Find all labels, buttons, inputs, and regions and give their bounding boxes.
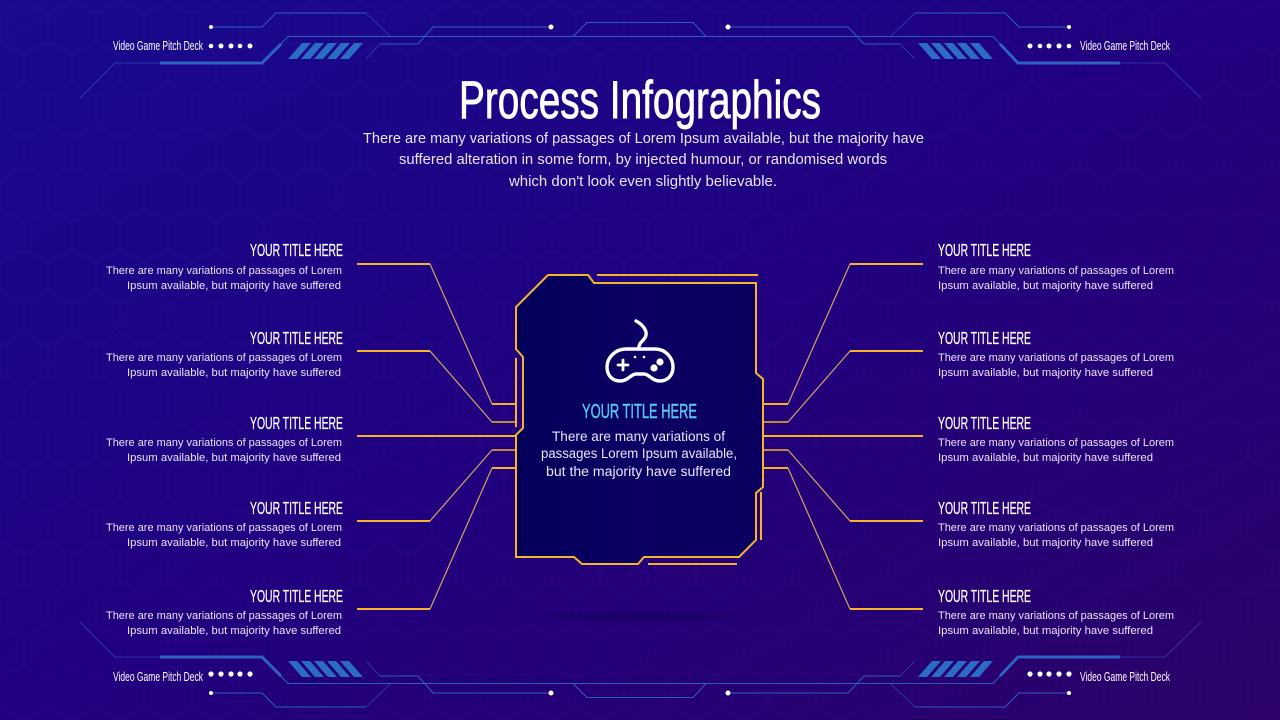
right item 4: YOUR TITLE HERE bbox=[938, 498, 1031, 518]
panel frame bbox=[516, 275, 763, 564]
left item 4: There are many variations of passages of Lorem bbox=[106, 522, 342, 534]
panel body text bbox=[541, 429, 737, 479]
left item 3: There are many variations of passages of Lorem bbox=[106, 437, 342, 449]
left item 3 bbox=[106, 413, 343, 464]
left item 2: There are many variations of passages of Lorem bbox=[106, 352, 342, 364]
title: Process Infographics bbox=[459, 71, 821, 130]
left item 4: YOUR TITLE HERE bbox=[250, 498, 343, 518]
subtitle: suffered alteration in some form, by injected humour, or randomised words bbox=[399, 152, 887, 168]
right item 2: YOUR TITLE HERE bbox=[938, 328, 1031, 348]
right item 3: There are many variations of passages of Lorem bbox=[938, 437, 1174, 449]
right item 1: YOUR TITLE HERE bbox=[938, 240, 1031, 260]
left item 3: YOUR TITLE HERE bbox=[250, 413, 343, 433]
left item 1 bbox=[106, 240, 343, 292]
left item 1: Ipsum available, but majority have suffered bbox=[127, 280, 341, 292]
panel heading: YOUR TITLE HERE bbox=[582, 401, 697, 423]
left item 2: YOUR TITLE HERE bbox=[250, 328, 343, 348]
right item 2 bbox=[938, 328, 1174, 379]
left item 5: There are many variations of passages of Lorem bbox=[106, 610, 342, 622]
right item 4: There are many variations of passages of Lorem bbox=[938, 522, 1174, 534]
left item 5: YOUR TITLE HERE bbox=[250, 586, 343, 606]
left item 2 bbox=[106, 328, 343, 379]
deck label bottom right bbox=[1027, 670, 1171, 684]
left item 4 bbox=[106, 498, 343, 549]
right item 3 bbox=[938, 413, 1174, 464]
right item 2: Ipsum available, but majority have suffered bbox=[938, 367, 1153, 379]
left item 1: YOUR TITLE HERE bbox=[250, 240, 343, 260]
panel body text: There are many variations of bbox=[552, 429, 725, 444]
deck label bottom right: Video Game Pitch Deck bbox=[1080, 670, 1171, 684]
right item 5: There are many variations of passages of Lorem bbox=[938, 610, 1174, 622]
right item 3: Ipsum available, but majority have suffered bbox=[938, 452, 1153, 464]
right item 5: YOUR TITLE HERE bbox=[938, 586, 1031, 606]
left item 5 bbox=[106, 586, 343, 637]
panel body text: passages Lorem Ipsum available, bbox=[541, 446, 737, 461]
subtitle bbox=[363, 131, 924, 190]
deck label top right: Video Game Pitch Deck bbox=[1080, 39, 1171, 53]
deck label top left: Video Game Pitch Deck bbox=[113, 39, 204, 53]
left item 2: Ipsum available, but majority have suffered bbox=[127, 367, 341, 379]
left item 5: Ipsum available, but majority have suffered bbox=[127, 625, 341, 637]
bottom circuit decoration, left half bbox=[80, 622, 706, 707]
right item 5 bbox=[938, 586, 1174, 637]
panel body text: but the majority have suffered bbox=[546, 464, 731, 479]
subtitle: which don't look even slightly believable. bbox=[508, 174, 777, 190]
connector lines, right bbox=[764, 264, 923, 609]
right item 4: Ipsum available, but majority have suffered bbox=[938, 537, 1153, 549]
left item 1: There are many variations of passages of Lorem bbox=[106, 265, 342, 277]
top circuit decoration, left half bbox=[80, 13, 706, 98]
deck label top right bbox=[1028, 39, 1171, 53]
frame accent lines bbox=[516, 275, 761, 564]
right item 1 bbox=[938, 240, 1174, 292]
right item 2: There are many variations of passages of Lorem bbox=[938, 352, 1174, 364]
right item 3: YOUR TITLE HERE bbox=[938, 413, 1031, 433]
connector lines, left bbox=[357, 264, 516, 609]
left item 4: Ipsum available, but majority have suffered bbox=[127, 537, 341, 549]
panel: center bbox=[516, 275, 763, 564]
right item 1: There are many variations of passages of Lorem bbox=[938, 265, 1174, 277]
icon: game controller bbox=[607, 321, 673, 381]
left item 3: Ipsum available, but majority have suffered bbox=[127, 452, 341, 464]
right item 4 bbox=[938, 498, 1174, 549]
right item 5: Ipsum available, but majority have suffered bbox=[938, 625, 1153, 637]
subtitle: There are many variations of passages of Lorem Ipsum available, but the majority have bbox=[363, 131, 924, 147]
top circuit decoration, right half bbox=[640, 13, 1201, 98]
panel shadow bbox=[515, 610, 765, 624]
right item 1: Ipsum available, but majority have suffered bbox=[938, 280, 1153, 292]
deck label bottom left: Video Game Pitch Deck bbox=[113, 670, 204, 684]
bottom circuit decoration, right half bbox=[640, 622, 1201, 707]
